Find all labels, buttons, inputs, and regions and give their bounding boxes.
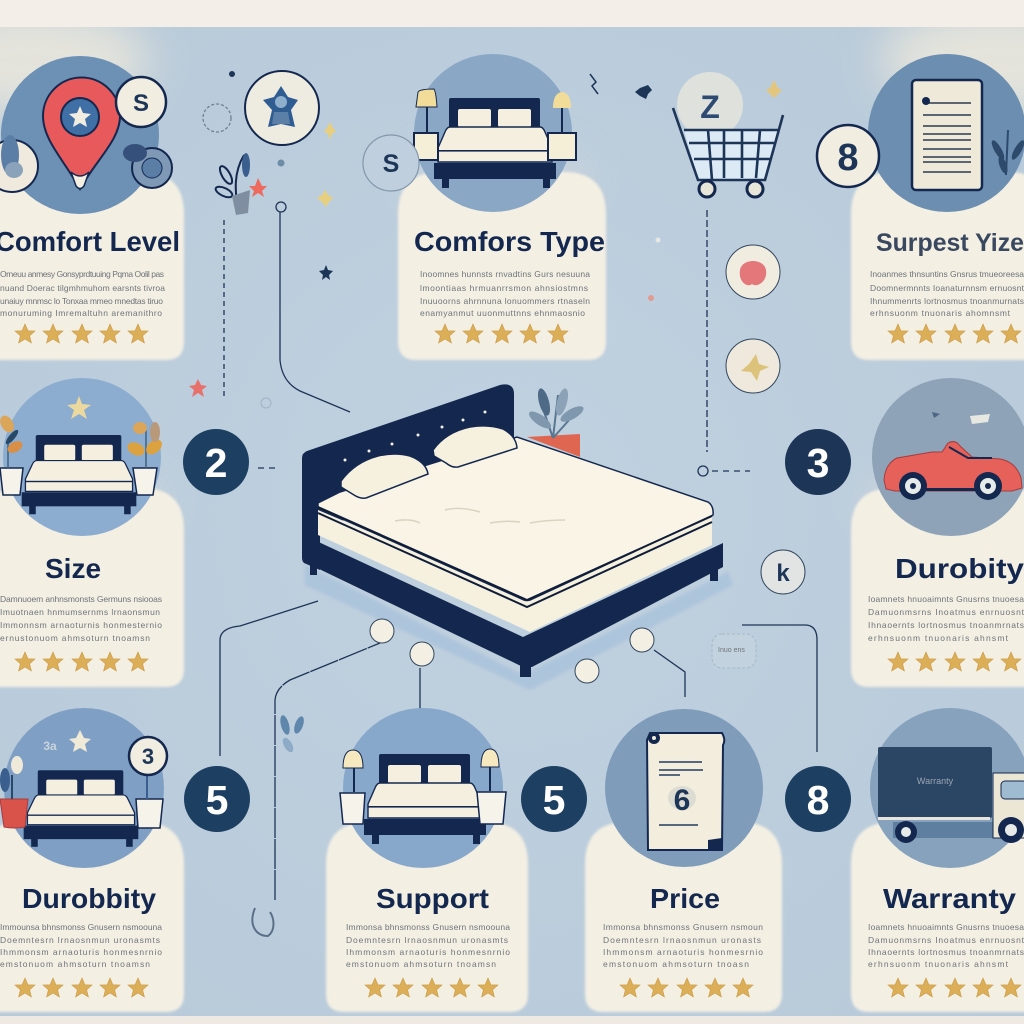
icon circle (343, 708, 503, 868)
panel: warranty (851, 708, 1024, 1012)
headboard (302, 384, 514, 570)
body text (868, 594, 1024, 643)
bottom strip (0, 1016, 1024, 1024)
body text: Immonsa bhnsmonss Gnusern nsmoouna (346, 922, 510, 932)
body text: Ioamnets hnuoaimnts Gnusrns tnuoesa (868, 922, 1024, 932)
badge 2 (183, 429, 249, 495)
card (398, 172, 606, 360)
body text: Ihnaoernts lortnosmus tnoanmrnats (868, 947, 1024, 957)
number badge (817, 125, 879, 187)
icon: bed with lamps (340, 749, 506, 844)
body text: Inuuoorns ahrnnuna lonuommers rtnaseln (420, 296, 590, 306)
badge 2: 2 (205, 440, 227, 486)
body text: Doomnermnnts Ioanaturnnsm ernuosnt (870, 283, 1024, 293)
pillow right (433, 426, 517, 467)
card (851, 822, 1024, 1012)
badge 8 (785, 766, 851, 832)
body text: erhnsuonm tnuonaris ahnsmt (868, 959, 1009, 969)
body text (420, 269, 590, 318)
body text (603, 922, 763, 969)
body text: Orneuu anmesy Gonsyprdtuuing Pqma Oolil pas (0, 269, 164, 279)
body text: Inoomnes hunnsts rnvadtins Gurs nesuuna (420, 269, 590, 279)
body text (346, 922, 510, 969)
body text: Doemntesrn lrnaosnmun uronasts (603, 935, 761, 945)
central bed illustration (302, 384, 723, 677)
icon circle (868, 54, 1024, 212)
top strip (0, 0, 1024, 27)
panel: durability left (0, 708, 184, 1012)
badge 3: 3 (807, 440, 829, 486)
icon circle (870, 708, 1024, 868)
body text: Imuotnaen hnmumsernms lrnaonsmun (0, 607, 160, 617)
body text: Ioamnets hnuoaimnts Gnusrns tnuoesa (868, 594, 1024, 604)
panel: durability right (851, 378, 1024, 687)
panel: size (0, 378, 184, 687)
k badge: k (776, 560, 790, 587)
body text: lmoontiaas hrmuanrrsmon ahnsiostmns (420, 283, 588, 293)
icon: flower doodle (123, 144, 172, 188)
body text: Ihmmonsm arnaoturis honmesnrnio (346, 947, 510, 957)
body text: Damuonmsrns Inoatmus enrnuosnt (868, 607, 1024, 617)
number badge: S (133, 90, 149, 117)
body text: Damuonmsrns Inoatmus enrnuosnt (868, 935, 1024, 945)
icon: red car (884, 412, 1022, 500)
icon: bed with plants (0, 396, 165, 514)
body text: enamyanmut uuonmuttnns ehnmaosnio (420, 308, 585, 318)
heading: Warranty (883, 883, 1016, 914)
body text: Doemntesrn lrnaosnmun uronasmts (346, 935, 508, 945)
number badge (116, 77, 166, 127)
panel: support size (817, 54, 1024, 360)
body text: unaiuy mnmsc lo Tonxaa mmeo mnedtas tiruo (0, 296, 163, 306)
quilt marks (395, 508, 565, 523)
star rating (888, 324, 1021, 343)
icon: price document: 6 (674, 784, 690, 817)
body text: emstonuom ahmsoturn tnoamsn (346, 959, 496, 969)
badge 5 middle (521, 766, 587, 832)
star rating (15, 652, 148, 671)
star rating (15, 324, 148, 343)
body text: monuruming Imremaltuhn aremanithro (0, 308, 162, 318)
k badge (761, 550, 805, 594)
panel: price (585, 709, 782, 1012)
outline badge: S (383, 150, 399, 178)
tufting buttons (344, 410, 486, 462)
body text (868, 922, 1024, 969)
heading: Durobity (895, 553, 1024, 584)
icon: bed with plant and badge: 3 (142, 744, 154, 769)
card (851, 488, 1024, 687)
frame legs (310, 560, 718, 677)
card (585, 822, 782, 1012)
small faded note: Inuo ens (718, 647, 745, 654)
body text: Damnuoem anhnsmonsts Germuns nsiooas (0, 594, 162, 604)
body text (870, 269, 1024, 318)
body text: Ihmmonsm arnaoturis honmesrnio (603, 947, 763, 957)
red icon badge (726, 245, 780, 299)
body text: erhnsuonm tnuonaris ahnsmt (868, 633, 1009, 643)
star rating (365, 978, 498, 997)
body text: emstonuom ahmsoturn tnoasn (603, 959, 749, 969)
body text: Ihmmonsm arnaoturis honmesnrnio (0, 947, 162, 957)
star rating (620, 978, 753, 997)
card (851, 172, 1024, 360)
panel: comfort level (0, 56, 184, 360)
body text: ernustonuom ahmsoturn tnoamsn (0, 633, 150, 643)
badge 5 left (184, 766, 250, 832)
icon: bed with plant and badge (0, 730, 167, 847)
star badge (245, 71, 319, 145)
background glow (0, 5, 1024, 525)
body text: nuand Doerac tilgmhmuhom earsnts tivroa (0, 283, 165, 293)
icon circle (872, 378, 1024, 536)
heading: Comfors Type (414, 226, 605, 257)
star rating (15, 978, 148, 997)
body text: Immonsa bhnsmonss Gnusern nsmoun (603, 922, 763, 932)
small faded note (712, 634, 756, 668)
badge 3 (785, 429, 851, 495)
pillow left (341, 454, 428, 498)
card (0, 172, 184, 360)
heading: Support (376, 883, 489, 914)
card (0, 822, 184, 1012)
heading: Price (650, 883, 720, 914)
icon: bed with lamps (414, 89, 576, 188)
heading: Size (45, 553, 101, 584)
icon: price document (647, 732, 724, 850)
body text (0, 594, 162, 643)
badge 5 left: 5 (206, 777, 228, 823)
star rating (435, 324, 568, 343)
icon circle (4, 708, 164, 868)
icon: map pin (43, 78, 120, 189)
mattress top (318, 437, 713, 600)
icon circle (1, 56, 159, 214)
body text: emstonuom ahmsoturn tnoamsn (0, 959, 150, 969)
icon: sprig (989, 130, 1024, 175)
frame (310, 538, 723, 667)
number badge: 8 (837, 137, 859, 179)
star rating (888, 652, 1021, 671)
icon: truck (878, 747, 1024, 843)
mattress piping (318, 507, 712, 607)
body text: Ihnaoernts lortnosmus tnoanmrnats (868, 620, 1024, 630)
card (0, 488, 184, 687)
small connector node circles (370, 619, 654, 683)
body text: Doemntesrn lrnaosnmun uronasmts (0, 935, 160, 945)
card (326, 822, 528, 1012)
connector lines (203, 104, 817, 900)
body text (0, 269, 165, 318)
heading: Comfort Level (0, 226, 180, 257)
plant behind bed (526, 387, 586, 457)
badge Z and shopping cart: Z (700, 89, 720, 125)
icon: document (912, 80, 982, 190)
icon: bed with plant and badge: 3a (43, 739, 57, 753)
body text: erhnsuonm tnuonaris ahomnsmt (870, 308, 1011, 318)
body text: Immonnsm arnaoturnis honmesternio (0, 620, 162, 630)
body text: Immounsa bhnsmonss Gnusern nsmoouna (0, 922, 162, 932)
icon circle (605, 709, 763, 867)
body text (0, 922, 162, 969)
mattress side (318, 510, 712, 632)
heading: Durobbity (22, 883, 156, 914)
body text: Ihnummenrts lortnosmus tnoanmurnats (870, 296, 1024, 306)
panel: comfort type (363, 54, 606, 360)
heading: Surpest Yize (876, 229, 1024, 257)
badge Z and shopping cart (673, 72, 783, 197)
badge 5 middle: 5 (543, 777, 565, 823)
icon: truck: Warranty (917, 776, 954, 786)
icon circle (3, 378, 161, 536)
icon: map left (0, 135, 38, 192)
badge 8: 8 (807, 777, 829, 823)
star rating (888, 978, 1021, 997)
decorative plant and sparkles (189, 71, 782, 936)
body text: Inoanmes thnsuntins Gnsrus tmueoreesa (870, 269, 1024, 279)
panel: support (326, 708, 528, 1012)
outline badge (363, 135, 419, 191)
star icon badge (726, 339, 780, 393)
icon circle (414, 54, 572, 212)
floor shadow (305, 565, 733, 690)
